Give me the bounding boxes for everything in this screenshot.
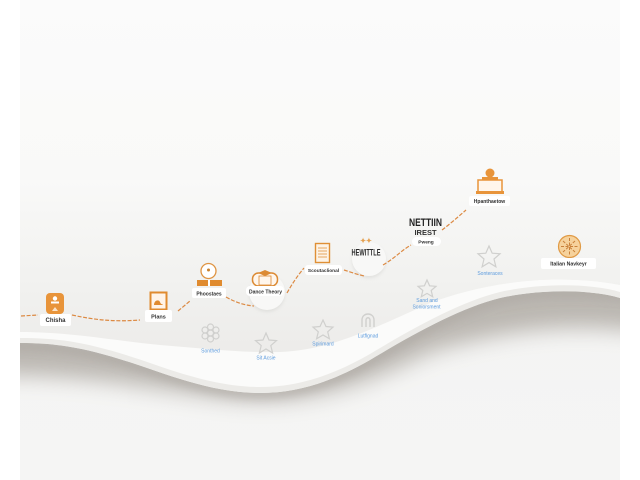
label: Dance Theory <box>249 290 282 296</box>
icon: star large <box>478 246 500 267</box>
label: Plans <box>151 314 166 320</box>
icon: star small <box>418 280 436 297</box>
label: Hpanthaetow <box>474 199 505 205</box>
step 1: Chisha <box>40 293 71 326</box>
caption: Spirimard <box>312 342 334 348</box>
step 4: Dance Theory <box>246 270 284 296</box>
ribbon face <box>20 280 620 387</box>
ribbon rim <box>30 291 620 393</box>
icon: star badge <box>313 320 333 339</box>
step dips <box>249 242 386 312</box>
icon: person badge <box>46 293 64 314</box>
icon: outline tag <box>362 314 374 327</box>
heading: NETTIIN <box>409 217 442 229</box>
step 2: Plans <box>145 292 172 322</box>
caption: Sand and <box>416 298 438 304</box>
subheading: IREST <box>414 228 437 237</box>
ribbon band <box>20 280 620 393</box>
dashed progress path <box>21 210 466 321</box>
label: HEWITTLE <box>352 248 380 258</box>
caption: Sonteraces <box>477 271 503 277</box>
caption: Soniorsment <box>412 304 441 310</box>
icon: picture frame <box>150 292 166 310</box>
icon: lightbulb on bar <box>197 264 222 286</box>
step 8: Hpanthaetow <box>469 168 510 206</box>
label: Phoostaes <box>196 292 222 298</box>
icon: star <box>255 333 276 353</box>
step 9: Italian Navkeyr <box>541 236 596 269</box>
blue captions <box>201 271 503 362</box>
caption: Sonthed <box>201 348 220 354</box>
step 3: Phoostaes <box>192 264 226 298</box>
icon: person at desk <box>476 168 504 194</box>
icon: flower <box>202 324 219 342</box>
icon: document <box>316 244 330 262</box>
step 7: Nettiin Rest <box>409 217 442 246</box>
icon: small orange marks: ✦✦ <box>360 237 372 245</box>
label: Italian Navkeyr <box>550 262 587 268</box>
ribbon shadow <box>0 283 640 400</box>
caption: Sit Acsie <box>256 356 276 362</box>
label: Scoutaclional <box>308 268 339 274</box>
infographic canvas <box>20 168 620 480</box>
icon: cap in rounded frame <box>252 270 278 286</box>
step 6: Hewttle <box>352 237 380 258</box>
label: Pweng <box>418 240 434 246</box>
label: Chisha <box>45 318 66 324</box>
step 5: Scoutaclional <box>305 244 342 275</box>
background panel <box>20 193 620 480</box>
caption: Lutflgnad <box>358 334 379 340</box>
icon: pizza medallion <box>558 236 580 258</box>
secondary items <box>202 246 500 353</box>
